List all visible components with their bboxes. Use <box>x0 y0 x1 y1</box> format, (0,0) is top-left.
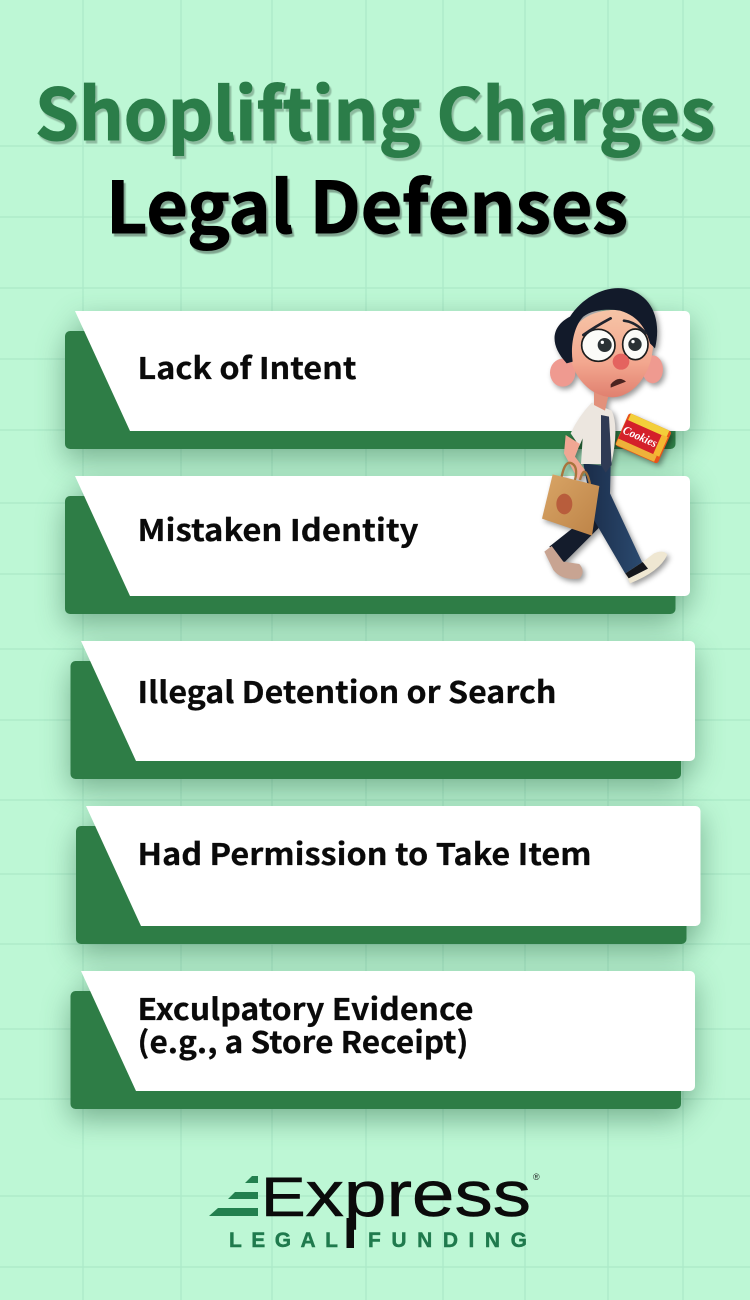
panel: Lack of Intent: Lack of Intent <box>138 344 357 388</box>
arm <box>564 435 585 480</box>
snack packet: Cookies <box>621 423 660 450</box>
panel: Exculpatory Evidence: (e.g., a Store Receipt) <box>138 1018 469 1062</box>
ears <box>550 359 575 387</box>
face <box>569 310 653 397</box>
title: Legal Defenses: Legal Defenses <box>106 152 628 254</box>
panel: Mistaken Identity: Mistaken Identity <box>138 506 418 550</box>
title: Shoplifting Charges: Shoplifting Charges <box>35 59 715 161</box>
logo stripes <box>209 1176 258 1216</box>
mouth <box>611 379 626 388</box>
icon: worried shopper character <box>542 288 672 583</box>
neck <box>594 392 609 411</box>
back shoe <box>544 546 583 579</box>
panel: Had Permission to Take Item <box>76 806 700 944</box>
left eye <box>582 329 615 361</box>
wordmark Express: Express <box>261 1158 531 1230</box>
panel: Illegal Detention or Search: Illegal Detention or Search <box>138 668 556 712</box>
tie <box>601 415 612 473</box>
logo: Express Legal Funding <box>209 1158 540 1252</box>
front leg <box>583 463 643 576</box>
bag <box>542 463 599 536</box>
shirt <box>571 403 615 464</box>
p descender <box>346 1218 354 1248</box>
brows <box>583 318 646 335</box>
wordmark Legal: LEGAL <box>229 1229 338 1252</box>
nose <box>613 354 629 370</box>
panel: Had Permission to Take Item: Had Permission to Take Item <box>138 830 592 874</box>
panel: Lack of Intent <box>65 311 690 449</box>
snack packet <box>615 413 672 464</box>
registered mark: ® <box>533 1172 540 1182</box>
right eye <box>623 329 648 360</box>
hair <box>555 288 657 363</box>
panel: Illegal Detention or Search <box>70 641 695 779</box>
panel: Mistaken Identity <box>65 476 690 614</box>
panel: Exculpatory Evidence <box>70 971 695 1109</box>
panel: Exculpatory Evidence: Exculpatory Evidence <box>138 985 473 1029</box>
back leg <box>549 493 605 563</box>
front shoe <box>625 552 667 583</box>
wordmark Funding: FUNDING <box>368 1229 527 1252</box>
